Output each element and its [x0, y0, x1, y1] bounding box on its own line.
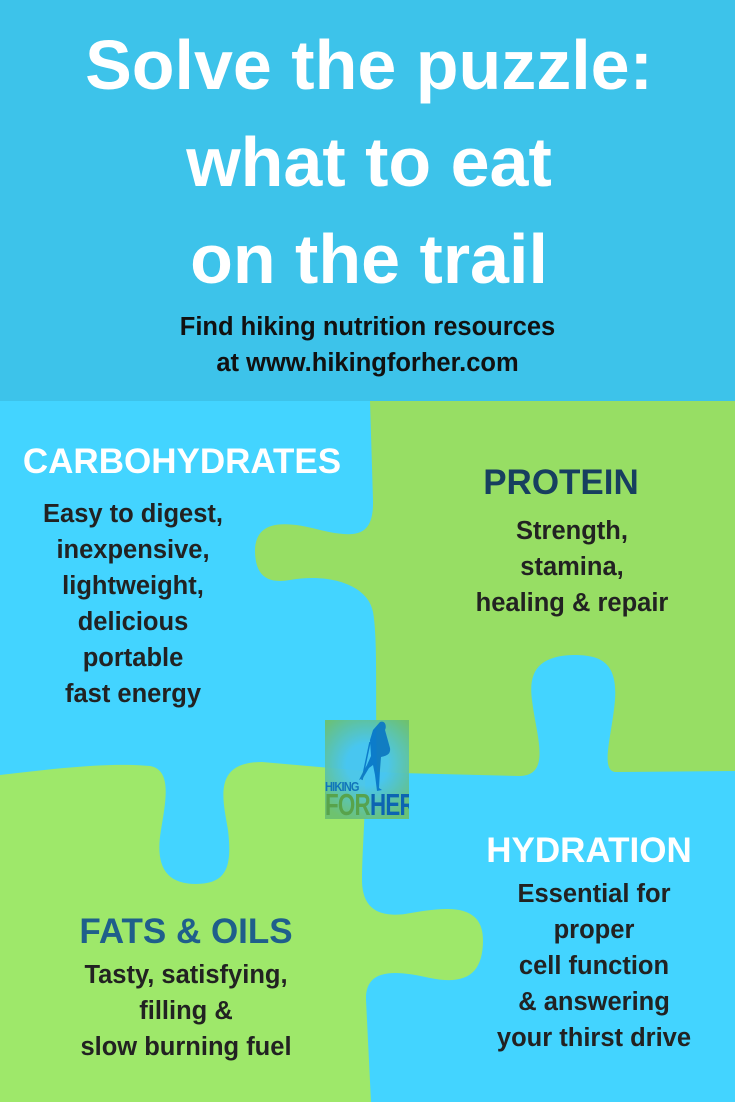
carbohydrates text: fast energy [65, 680, 201, 708]
hydration text: cell function [519, 952, 669, 980]
title [85, 26, 653, 298]
protein text: Strength, [516, 517, 628, 545]
piece: fats (green bottom-left) [0, 762, 483, 1102]
piece: protein (green top-right) [255, 401, 735, 776]
fats heading: FATS & OILS [79, 912, 293, 951]
logo text: HIKING [325, 779, 359, 794]
hydration text: your thirst drive [497, 1024, 691, 1052]
fats text: Tasty, satisfying, [84, 961, 288, 989]
header band [0, 0, 735, 401]
hydration text [497, 880, 691, 1052]
carbohydrates text: lightweight, [62, 572, 204, 600]
hydration heading: HYDRATION [486, 831, 692, 870]
title: on the trail [190, 220, 548, 298]
fats text: filling & [139, 997, 233, 1025]
fats text [80, 961, 292, 1061]
subtitle [180, 313, 555, 377]
carbohydrates text [43, 500, 223, 708]
fats text: slow burning fuel [80, 1033, 292, 1061]
subtitle: at www.hikingforher.com [216, 349, 519, 377]
title: what to eat [186, 123, 552, 201]
hydration text: proper [554, 916, 634, 944]
logo [325, 720, 409, 819]
protein text: stamina, [520, 553, 624, 581]
carbohydrates text: inexpensive, [56, 536, 210, 564]
subtitle: Find hiking nutrition resources [180, 313, 555, 341]
icon: hiker silhouette [359, 722, 390, 791]
protein text [476, 517, 668, 617]
carbohydrates text: delicious [78, 608, 188, 636]
carbohydrates text: portable [83, 644, 183, 672]
carbohydrates heading: CARBOHYDRATES [23, 442, 341, 481]
hydration text: Essential for [517, 880, 671, 908]
protein heading: PROTEIN [483, 463, 639, 502]
carbohydrates text: Easy to digest, [43, 500, 223, 528]
protein text: healing & repair [476, 589, 668, 617]
title: Solve the puzzle: [85, 26, 653, 104]
hydration text: & answering [518, 988, 670, 1016]
